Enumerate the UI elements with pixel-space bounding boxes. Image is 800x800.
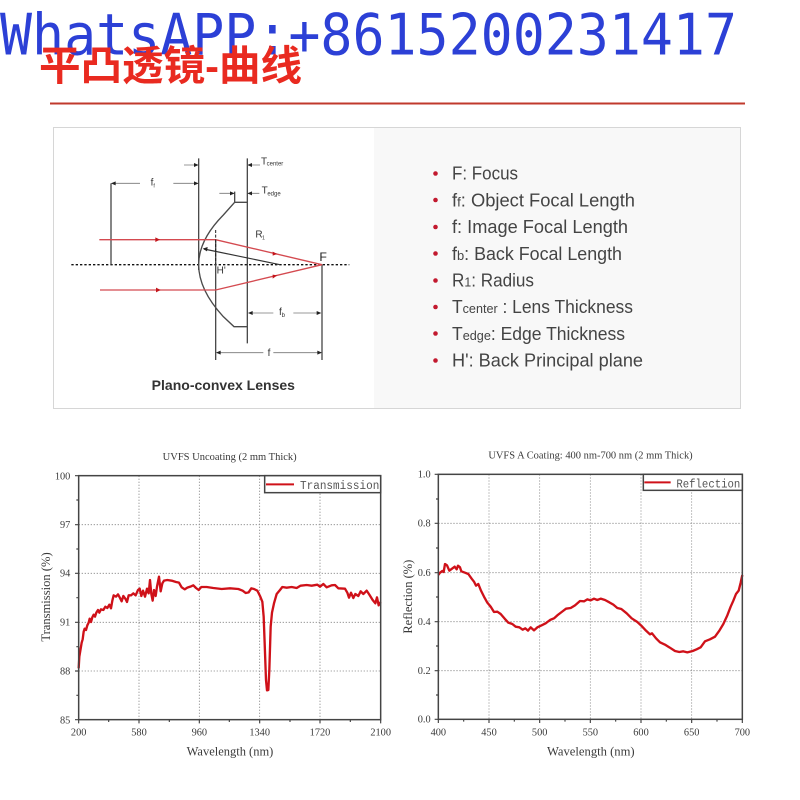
- grid lines: [438, 474, 742, 719]
- principal plane dash: [214, 230, 217, 265]
- x tick labels: 700: [735, 728, 750, 739]
- diagram labels: f: [279, 307, 282, 318]
- grid lines: [79, 476, 381, 720]
- diagram labels: f: [151, 178, 154, 189]
- lens outline: [111, 158, 322, 360]
- y tick labels: 97: [60, 520, 70, 531]
- y tick labels: 91: [60, 618, 70, 629]
- legend bullet list: [433, 164, 643, 370]
- x axis title: Wavelength (nm): [187, 744, 273, 758]
- x tick labels: 1720: [310, 728, 330, 739]
- y tick labels: 100: [55, 471, 70, 482]
- watermark: WhatsAPP contact number: WhatsAPP:+8615200231417: [0, 2, 737, 68]
- optical axis: [71, 263, 349, 267]
- chart: transmission: [39, 452, 391, 758]
- y tick labels: 0.8: [418, 519, 431, 530]
- legend: transmission: Transmission: [300, 479, 379, 493]
- x tick labels: [71, 728, 391, 739]
- diagram labels: 1: [262, 235, 265, 241]
- x tick labels: 550: [583, 728, 598, 739]
- diagram labels: [151, 157, 327, 359]
- legend: reflection: Reflection: [676, 477, 740, 491]
- x tick labels: 2100: [370, 728, 391, 739]
- x tick labels: 600: [633, 728, 649, 739]
- chart: reflection: [401, 451, 750, 758]
- title underline: [50, 102, 745, 104]
- diagram labels: F: [319, 250, 327, 264]
- x axis title: Wavelength (nm): [547, 744, 635, 758]
- chart title: UVFS Uncoating (2 mm Thick): [163, 452, 297, 463]
- diagram caption: Plano-convex Lenses: [152, 378, 295, 393]
- diagram labels: T: [262, 186, 268, 197]
- y tick labels: [55, 471, 70, 726]
- radius arrow: [203, 247, 280, 265]
- legend bullet list: Tcenter : Lens Thickness: [452, 297, 633, 317]
- y axis title: Reflection (%): [401, 560, 415, 634]
- diagram labels: f: [268, 348, 271, 359]
- y tick labels: 0.6: [418, 568, 431, 579]
- y tick labels: 0.0: [418, 715, 431, 726]
- y tick labels: 0.4: [418, 617, 431, 628]
- y tick labels: 94: [60, 569, 70, 580]
- reflection curve: [438, 564, 742, 652]
- legend: reflection: [643, 474, 742, 491]
- y tick labels: 88: [60, 666, 70, 677]
- plot frame and ticks: [435, 474, 742, 723]
- diagram labels: T: [261, 157, 267, 168]
- chart title: UVFS A Coating: 400 nm-700 nm (2 mm Thick): [488, 451, 693, 462]
- transmission curve: [79, 577, 381, 690]
- legend bullet list: ff: Object Focal Length: [452, 190, 635, 210]
- legend bullet list: fb: Back Focal Length: [452, 244, 622, 264]
- y axis title: Transmission (%): [39, 552, 53, 642]
- x tick labels: 400: [431, 728, 446, 739]
- x tick labels: 500: [532, 728, 547, 739]
- diagram labels: edge: [267, 192, 281, 198]
- x tick labels: [431, 728, 750, 739]
- x tick labels: 580: [131, 728, 147, 739]
- diagram labels: f: [153, 184, 155, 190]
- y tick labels: [418, 470, 431, 726]
- diagram labels: b: [282, 313, 286, 319]
- y tick labels: 0.2: [418, 666, 431, 677]
- diagram: plano-convex lens: [71, 157, 349, 393]
- legend bullet list: F: Focus: [452, 164, 518, 184]
- diagram labels: H': [217, 265, 226, 276]
- diagram labels: center: [267, 162, 283, 168]
- legend bullet list: H': Back Principal plane: [452, 350, 643, 370]
- legend bullet list: Tedge: Edge Thickness: [452, 324, 625, 344]
- x tick labels: 650: [684, 728, 699, 739]
- legend: transmission: [265, 476, 381, 493]
- plot frame and ticks: [75, 476, 381, 723]
- x tick labels: 1340: [249, 728, 270, 739]
- legend bullet list: R1: Radius: [452, 270, 534, 290]
- x tick labels: 960: [192, 728, 207, 739]
- x tick labels: 200: [71, 728, 86, 739]
- light rays: [99, 237, 322, 292]
- y tick labels: 1.0: [418, 470, 431, 481]
- y tick labels: 85: [60, 715, 70, 726]
- panel: plano-convex lens diagram and legend: [54, 128, 740, 408]
- diagram labels: R: [255, 230, 263, 241]
- x tick labels: 450: [481, 728, 497, 739]
- legend bullet list: f: Image Focal Length: [452, 217, 628, 237]
- title: 平凸透镜-曲线: [39, 43, 302, 89]
- dimension arrows: [111, 163, 322, 355]
